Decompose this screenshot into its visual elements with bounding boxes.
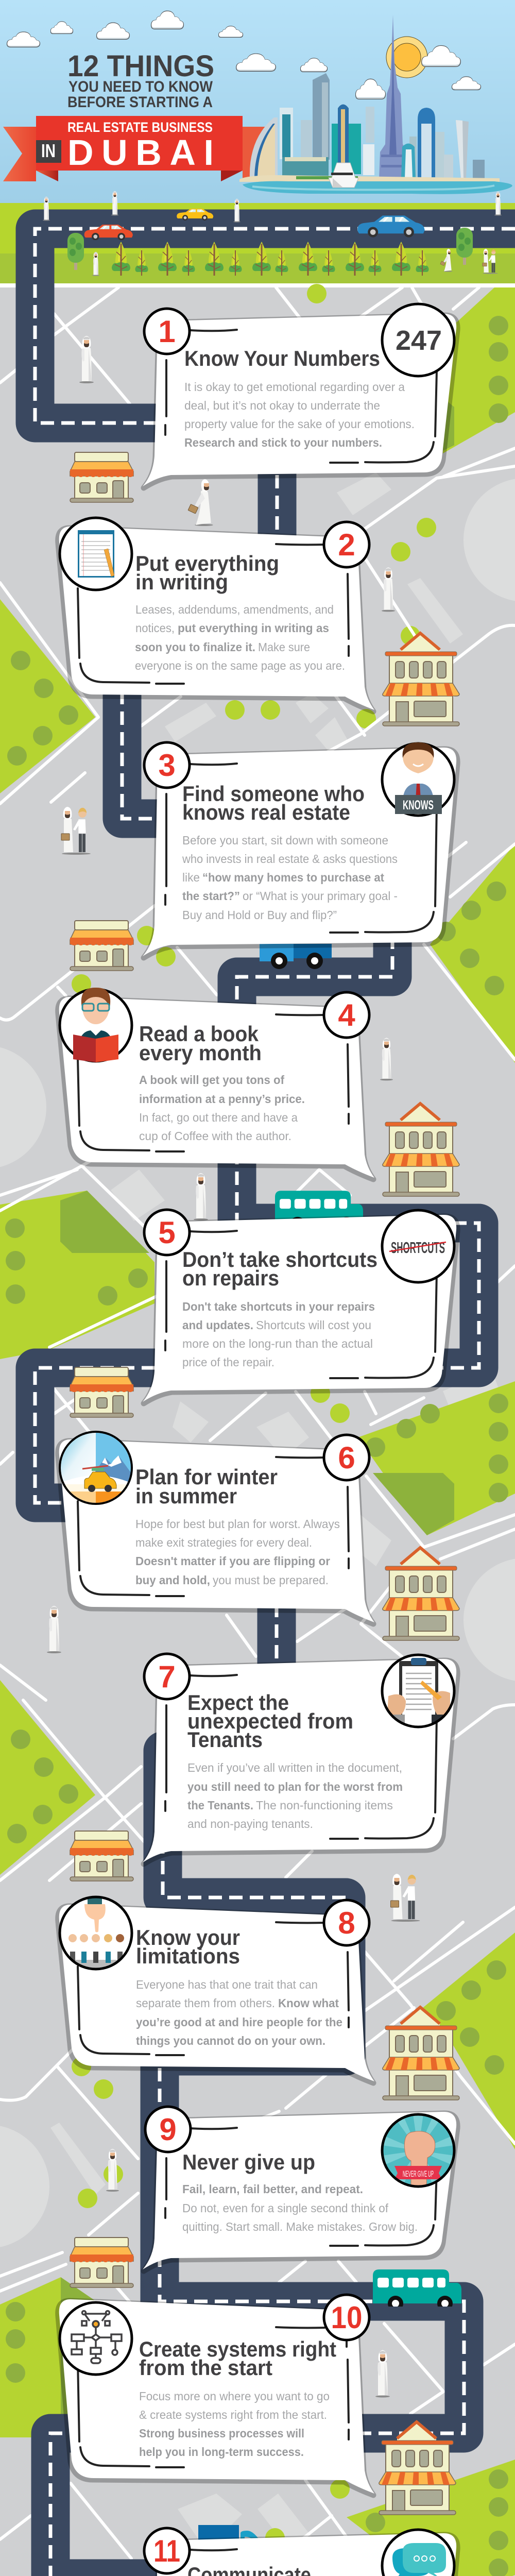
heading: every month <box>139 1041 262 1065</box>
body text <box>136 1978 342 2047</box>
body text: you still need to plan for the worst from <box>187 1780 403 1793</box>
heading: Know Your Numbers <box>184 346 380 370</box>
body text: deal, but it’s not okay to underrate the <box>184 399 380 412</box>
body text <box>139 2389 330 2459</box>
title ribbon: IN <box>41 140 56 161</box>
number badge <box>144 2528 190 2573</box>
number badge: 3 <box>158 748 176 783</box>
heading: in writing <box>135 570 228 594</box>
number badge <box>324 992 369 1038</box>
body text: separate them from others. <box>136 1996 275 2010</box>
body text: quitting. Start small. Make mistakes. Grow big. <box>182 2220 418 2233</box>
title ribbon: DUBAI <box>67 132 214 173</box>
number badge: 11 <box>153 2534 180 2568</box>
body text <box>187 1761 403 1831</box>
heading: Read a book <box>139 1022 259 1046</box>
body text: help you in long-term success. <box>139 2445 304 2459</box>
number badge <box>324 522 369 567</box>
body text: or “What is your primary goal - <box>243 889 398 903</box>
body text: & create systems right from the start. <box>139 2408 327 2421</box>
body text: and non-paying tenants. <box>187 1817 313 1831</box>
body text: The non-functioning items <box>256 1799 393 1812</box>
body text <box>182 834 398 922</box>
number badge: 5 <box>158 1215 176 1250</box>
number badge <box>324 2295 369 2340</box>
heading <box>135 551 279 594</box>
body text: A book will get you tons of <box>139 1073 284 1087</box>
heading <box>182 1247 377 1290</box>
header lawn <box>0 203 515 287</box>
title: YOU NEED TO KNOW <box>68 78 213 95</box>
number badge <box>144 742 190 788</box>
panel: 11 communicate <box>143 2528 457 2576</box>
sky background <box>0 0 515 203</box>
body text <box>182 2182 418 2233</box>
body text: more on the long-run than the actual <box>182 1337 373 1350</box>
icon: 247 <box>382 304 454 376</box>
body text: Buy and Hold or Buy and flip?” <box>182 908 337 922</box>
body text: notices, <box>135 621 175 635</box>
body text: buy and hold, <box>135 1573 210 1587</box>
body text: put everything in writing as <box>178 621 329 635</box>
icon: clipboard and hands <box>382 1655 454 1727</box>
delivery truck and buses <box>198 944 461 2548</box>
light green roundabout dots <box>72 284 442 2576</box>
heading: from the start <box>139 2355 272 2380</box>
cars on road <box>84 209 425 240</box>
panel: 9 never give up <box>143 2107 457 2271</box>
body text: things you cannot do on your own. <box>136 2034 325 2047</box>
icon: raised fist: NEVER GIVE UP <box>403 2169 434 2179</box>
body text <box>182 1300 375 1369</box>
heading <box>182 782 365 824</box>
body text: Do not, even for a single second think of <box>182 2201 389 2215</box>
number badge: 6 <box>338 1440 355 1475</box>
body text: the Tenants. <box>187 1799 253 1812</box>
panel: 8 know your limitations <box>58 1897 374 2083</box>
heading <box>139 1022 262 1065</box>
body text: Make sure <box>258 640 310 654</box>
icon: notepad <box>60 518 132 590</box>
title ribbon <box>3 116 276 181</box>
heading: Expect the <box>187 1690 289 1715</box>
number badge: 1 <box>158 314 176 349</box>
number badge: 8 <box>338 1906 355 1940</box>
Dubai skyline <box>239 15 512 194</box>
body text: property value for the sake of your emotions. <box>184 417 415 431</box>
icon: man with sign: KNOWS <box>403 798 434 812</box>
body text: Hope for best but plan for worst. Always <box>135 1517 340 1531</box>
body text: “how many homes to purchase at <box>202 871 384 884</box>
body text: like <box>182 871 200 884</box>
icon: man with sign <box>382 742 454 816</box>
heading: Create systems right <box>139 2337 336 2361</box>
body text: Don't take shortcuts in your repairs <box>182 1300 375 1313</box>
number badge: 4 <box>338 998 355 1032</box>
heading: in summer <box>135 1484 237 1508</box>
number badge <box>145 2107 191 2152</box>
heading: Plan for winter <box>135 1465 278 1489</box>
body text: who invests in real estate & asks questions <box>182 852 398 866</box>
body text: and updates. <box>182 1318 253 1332</box>
icon: reader with book <box>60 988 132 1062</box>
heading <box>136 1925 240 1968</box>
icon: raised fist <box>382 2114 454 2187</box>
body text: Shortcuts will cost you <box>256 1318 371 1332</box>
icon: 247: 247 <box>396 325 442 356</box>
dark park areas <box>60 398 454 2421</box>
number badge: 9 <box>159 2112 177 2147</box>
body text <box>135 1517 340 1587</box>
body text: Even if you’ve all written in the document, <box>187 1761 402 1774</box>
body text: Research and stick to your numbers. <box>184 436 382 449</box>
body text: Everyone has that one trait that can <box>136 1978 318 1991</box>
heading <box>139 2337 336 2380</box>
body text <box>184 380 415 449</box>
number badge: 7 <box>158 1659 176 1694</box>
heading: Don’t take shortcuts <box>182 1247 377 1272</box>
body text <box>139 1073 305 1143</box>
heading: limitations <box>136 1944 240 1968</box>
panel: 7 expect the unexpected from tenants <box>143 1654 457 1864</box>
body text: the start?” <box>182 889 240 903</box>
icon: winter and summer <box>60 1432 132 1504</box>
number badge: 10 <box>331 2300 363 2335</box>
body text: cup of Coffee with the author. <box>139 1129 291 1143</box>
body text: Before you start, sit down with someone <box>182 834 388 847</box>
heading <box>135 1465 278 1508</box>
number badge <box>324 1900 369 1945</box>
panel: 5 do not take shortcuts on repairs <box>143 1210 457 1403</box>
body text: It is okay to get emotional regarding over a <box>184 380 405 394</box>
number badge <box>144 309 190 354</box>
large shops <box>379 632 459 2576</box>
body text: In fact, go out there and have a <box>139 1111 298 1124</box>
heading: unexpected from <box>187 1709 353 1733</box>
panel: 10 create systems right from the start <box>58 2295 374 2495</box>
heading: knows real estate <box>182 800 350 824</box>
body text: soon you to finalize it. <box>135 640 255 654</box>
icon: shortcuts struck out <box>382 1210 454 1282</box>
heading: on repairs <box>182 1266 279 1290</box>
row of trees <box>67 228 473 276</box>
icon: shortcuts struck out: SHORTCUTS <box>391 1239 445 1257</box>
number badge <box>324 1435 369 1480</box>
heading <box>187 1690 353 1752</box>
heading: Put everything <box>135 551 279 575</box>
heading: Tenants <box>187 1727 263 1752</box>
body text: Strong business processes will <box>139 2427 304 2440</box>
body text <box>135 603 345 672</box>
title: 12 THINGS <box>67 49 214 83</box>
header people <box>43 191 502 276</box>
body text: everyone is on the same page as you are. <box>135 659 345 672</box>
panel: 4 read a book every month <box>58 988 374 1179</box>
map people <box>47 336 420 2576</box>
panel: 3 find someone who knows real estate <box>143 742 457 958</box>
title <box>67 49 214 111</box>
title ribbon: REAL ESTATE BUSINESS <box>67 120 213 135</box>
small shops <box>70 452 133 2576</box>
clouds <box>7 11 328 72</box>
number badge: 2 <box>338 528 355 562</box>
body text: information at a penny’s price. <box>139 1092 305 1106</box>
body text: you’re good at and hire people for the <box>136 2015 342 2029</box>
panel: 2 put everything in writing <box>58 518 374 711</box>
icon: hand picking people <box>60 1897 132 1969</box>
icon: speech bubbles <box>382 2530 454 2576</box>
body text: you must be prepared. <box>213 1573 329 1587</box>
body text: price of the repair. <box>182 1355 274 1369</box>
icon: flowchart <box>60 2302 132 2375</box>
body text: make exit strategies for every deal. <box>135 1536 312 1549</box>
body text: Know what <box>278 1996 339 2010</box>
number badge <box>144 1210 190 1255</box>
body text: Fail, learn, fail better, and repeat. <box>182 2182 363 2196</box>
heading: Never give up <box>182 2150 315 2174</box>
body text: Focus more on where you want to go <box>139 2389 330 2403</box>
heading: Find someone who <box>182 782 365 806</box>
body text: Leases, addendums, amendments, and <box>135 603 334 616</box>
panel: 6 plan for winter in summer <box>58 1432 374 1624</box>
heading: Know your <box>136 1925 240 1950</box>
body text: Doesn't matter if you are flipping or <box>135 1554 330 1568</box>
number badge <box>144 1654 190 1699</box>
panel: 1 know your numbers <box>143 304 457 488</box>
title: BEFORE STARTING A <box>67 94 213 111</box>
